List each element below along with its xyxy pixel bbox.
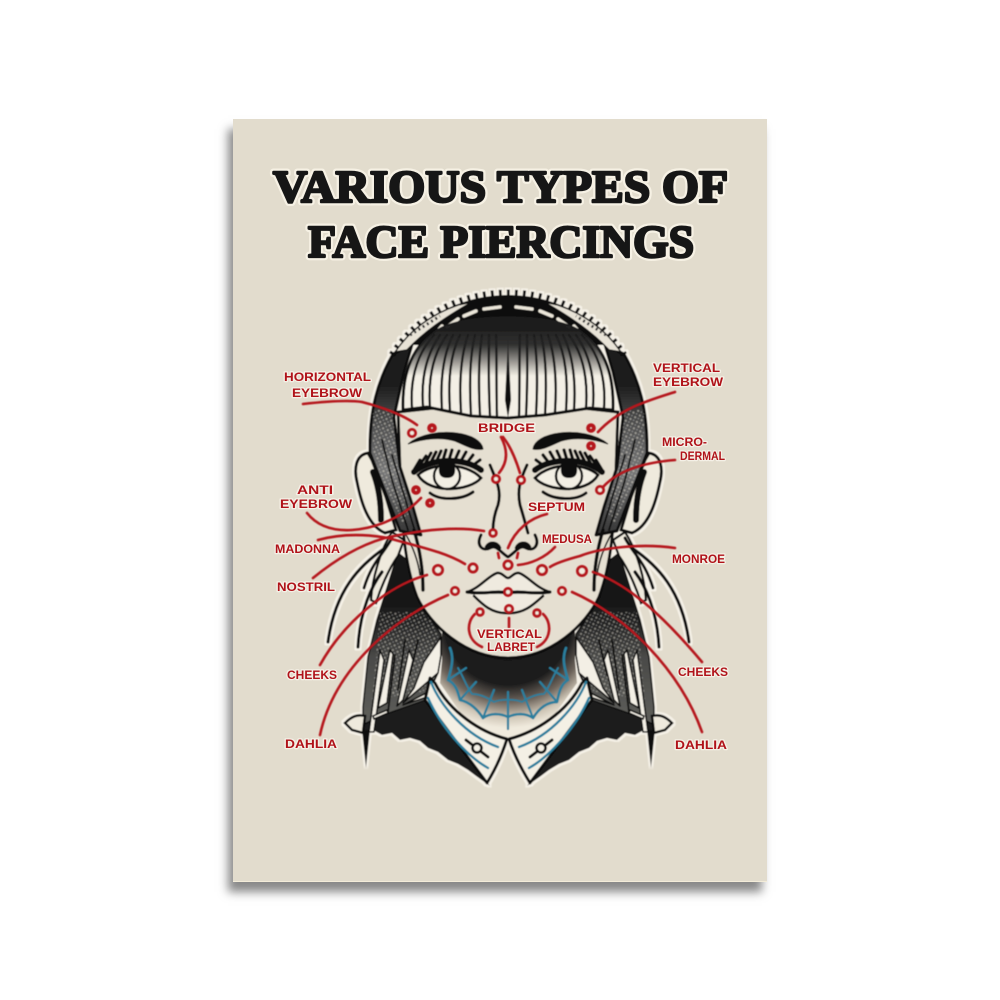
panel: poster background	[233, 119, 767, 882]
bar	[466, 740, 488, 757]
falling white lock	[371, 532, 404, 603]
flyaway strand outer	[328, 548, 385, 642]
label: anti eyebrow: EYEBROW	[280, 499, 352, 511]
label: medusa: MEDUSA	[542, 534, 592, 546]
web outer scallops	[448, 648, 568, 718]
nose base	[479, 535, 537, 557]
hair tick	[345, 715, 365, 733]
bridge line right	[503, 437, 520, 473]
collar right	[509, 678, 592, 783]
bridge line left	[499, 437, 506, 473]
crown dome with spiky edge	[390, 293, 626, 358]
right dahlia line	[572, 592, 702, 732]
bridge dots	[492, 476, 524, 484]
headband crescent left	[395, 302, 472, 352]
ring	[536, 744, 546, 752]
ring	[472, 744, 482, 752]
neck	[440, 625, 577, 738]
vertical eyebrow dots	[588, 425, 594, 449]
white hair dashes	[428, 307, 588, 342]
web inner scallops	[458, 668, 558, 702]
bangs centre parting	[505, 340, 511, 418]
lower lid	[430, 492, 473, 499]
title	[273, 161, 728, 267]
bangs base	[403, 330, 613, 418]
medusa dot	[504, 561, 512, 569]
label: vertical labret: VERTICAL	[477, 629, 542, 641]
headband crescent right	[544, 302, 621, 352]
left dahlia line	[320, 595, 448, 735]
right eye	[535, 450, 602, 499]
label: monroe: MONROE	[672, 554, 725, 566]
bangs hair strokes left	[412, 335, 497, 417]
label: micro-dermal: DERMAL	[680, 451, 725, 463]
eye white	[418, 466, 481, 489]
hair spike	[362, 730, 370, 768]
label: madonna: MADONNA	[275, 544, 340, 556]
lash band	[414, 461, 481, 472]
nostril line	[313, 529, 484, 578]
collar blue trim left	[428, 682, 498, 768]
label: vertical eyebrow: EYEBROW	[653, 377, 723, 389]
vertical eyebrow line	[598, 392, 675, 432]
piercing points	[408, 425, 604, 616]
title halo line 2: FACE PIERCINGS	[308, 216, 694, 267]
bangs dark root shading	[408, 316, 608, 378]
collar button right	[530, 740, 552, 757]
right eyebrow	[533, 432, 608, 449]
upper lip	[467, 573, 550, 592]
web spokes	[448, 668, 568, 729]
white strand long	[369, 650, 384, 732]
lips	[467, 573, 550, 613]
label: nostril: NOSTRIL	[277, 582, 335, 594]
nostrils	[487, 544, 529, 548]
white blade thin	[403, 690, 432, 705]
piercing leader lines	[303, 392, 702, 735]
left cheek line	[320, 575, 427, 665]
label: anti eyebrow	[280, 485, 352, 511]
label: micro-dermal	[662, 437, 725, 463]
shirt collar	[425, 678, 592, 783]
label: cheeks right: CHEEKS	[678, 667, 728, 679]
title line 1: VARIOUS TYPES OF	[273, 161, 728, 212]
label: dahlia left: DAHLIA	[285, 739, 337, 751]
labels	[275, 363, 728, 752]
madonna line	[318, 535, 465, 564]
back half right (mirrored)	[527, 453, 689, 786]
label: vertical eyebrow	[653, 363, 723, 389]
lower hair mass	[363, 553, 442, 725]
front side hair left	[370, 345, 423, 590]
strand over cheek	[414, 530, 423, 590]
mouth line	[467, 592, 550, 593]
medusa line	[518, 547, 555, 565]
stipple over lower hair	[372, 612, 441, 700]
collar left	[425, 678, 507, 783]
white blade left	[378, 650, 393, 708]
shoulder shading	[360, 700, 490, 786]
headband texture	[410, 316, 606, 335]
micro-dermal line	[603, 460, 675, 487]
label: horizontal eyebrow: EYEBROW	[292, 388, 362, 400]
nose left line	[490, 465, 499, 530]
hair strand lines	[388, 640, 418, 712]
label: vertical eyebrow: VERTICAL	[653, 363, 720, 375]
side hair band	[370, 345, 421, 535]
labret bracket left	[469, 614, 482, 647]
white strip	[373, 710, 388, 719]
back half left: lower hair, shoulder, ear	[328, 453, 490, 786]
dahlia dots	[452, 588, 566, 594]
monroe line	[550, 546, 675, 567]
label: vertical labret: LABRET	[487, 642, 535, 654]
labret bracket right	[537, 614, 549, 647]
septum line	[508, 514, 547, 548]
horizontal eyebrow line	[303, 401, 417, 425]
flyaway strand inner	[358, 572, 382, 647]
label: anti eyebrow: ANTI	[297, 485, 333, 497]
ear inner	[373, 472, 381, 520]
left eyebrow	[408, 432, 483, 449]
fringe bangs	[403, 316, 613, 418]
micro-dermal dot	[596, 486, 604, 494]
ear	[356, 453, 396, 533]
bangs hair strokes right	[519, 335, 604, 417]
cheek dots	[434, 566, 586, 576]
lip fill	[467, 573, 550, 613]
face shape	[398, 400, 618, 658]
label: vertical labret	[477, 629, 542, 654]
short strand	[364, 538, 392, 588]
monroe dot	[538, 566, 546, 574]
madonna dot	[469, 564, 477, 572]
title halo line 1: VARIOUS TYPES OF	[273, 161, 728, 212]
spiderweb neck tattoo	[448, 648, 568, 729]
nose	[479, 465, 537, 557]
stipple on side hair	[373, 410, 411, 525]
band strand lines	[382, 440, 414, 530]
anti eyebrow line	[307, 498, 421, 530]
label: horizontal eyebrow: HORIZONTAL	[284, 372, 371, 384]
dome	[390, 295, 626, 358]
nostril dot	[490, 530, 496, 536]
vertical labret tick	[508, 618, 510, 627]
anti eyebrow dots	[413, 487, 433, 506]
label: horizontal eyebrow	[284, 372, 371, 400]
white blade big	[403, 637, 441, 703]
nose right line	[519, 465, 528, 533]
left eye	[414, 450, 481, 499]
collar blue trim right	[519, 682, 589, 768]
pupil	[439, 464, 455, 478]
label: micro-dermal: MICRO-	[662, 437, 707, 449]
label: septum: SEPTUM	[528, 502, 585, 514]
nostril ticks	[498, 553, 518, 558]
right cheek line	[593, 572, 702, 662]
label: cheeks left: CHEEKS	[287, 670, 337, 682]
label: bridge: BRIDGE	[478, 423, 535, 435]
lower lip	[474, 596, 543, 613]
dome spikes	[392, 293, 624, 355]
illustration: woman's head with tattoo-style hair	[328, 293, 689, 786]
strand lock	[405, 533, 420, 575]
white blade centre	[397, 650, 413, 706]
bar	[530, 740, 552, 757]
title line 2: FACE PIERCINGS	[308, 216, 694, 267]
label: dahlia right: DAHLIA	[675, 740, 727, 752]
front side hair right (mirrored)	[594, 345, 647, 590]
iris	[434, 463, 460, 489]
collar button left	[466, 740, 488, 757]
horizontal eyebrow dots	[408, 425, 435, 436]
lashes	[414, 450, 480, 470]
lip and labret dots	[477, 588, 540, 616]
